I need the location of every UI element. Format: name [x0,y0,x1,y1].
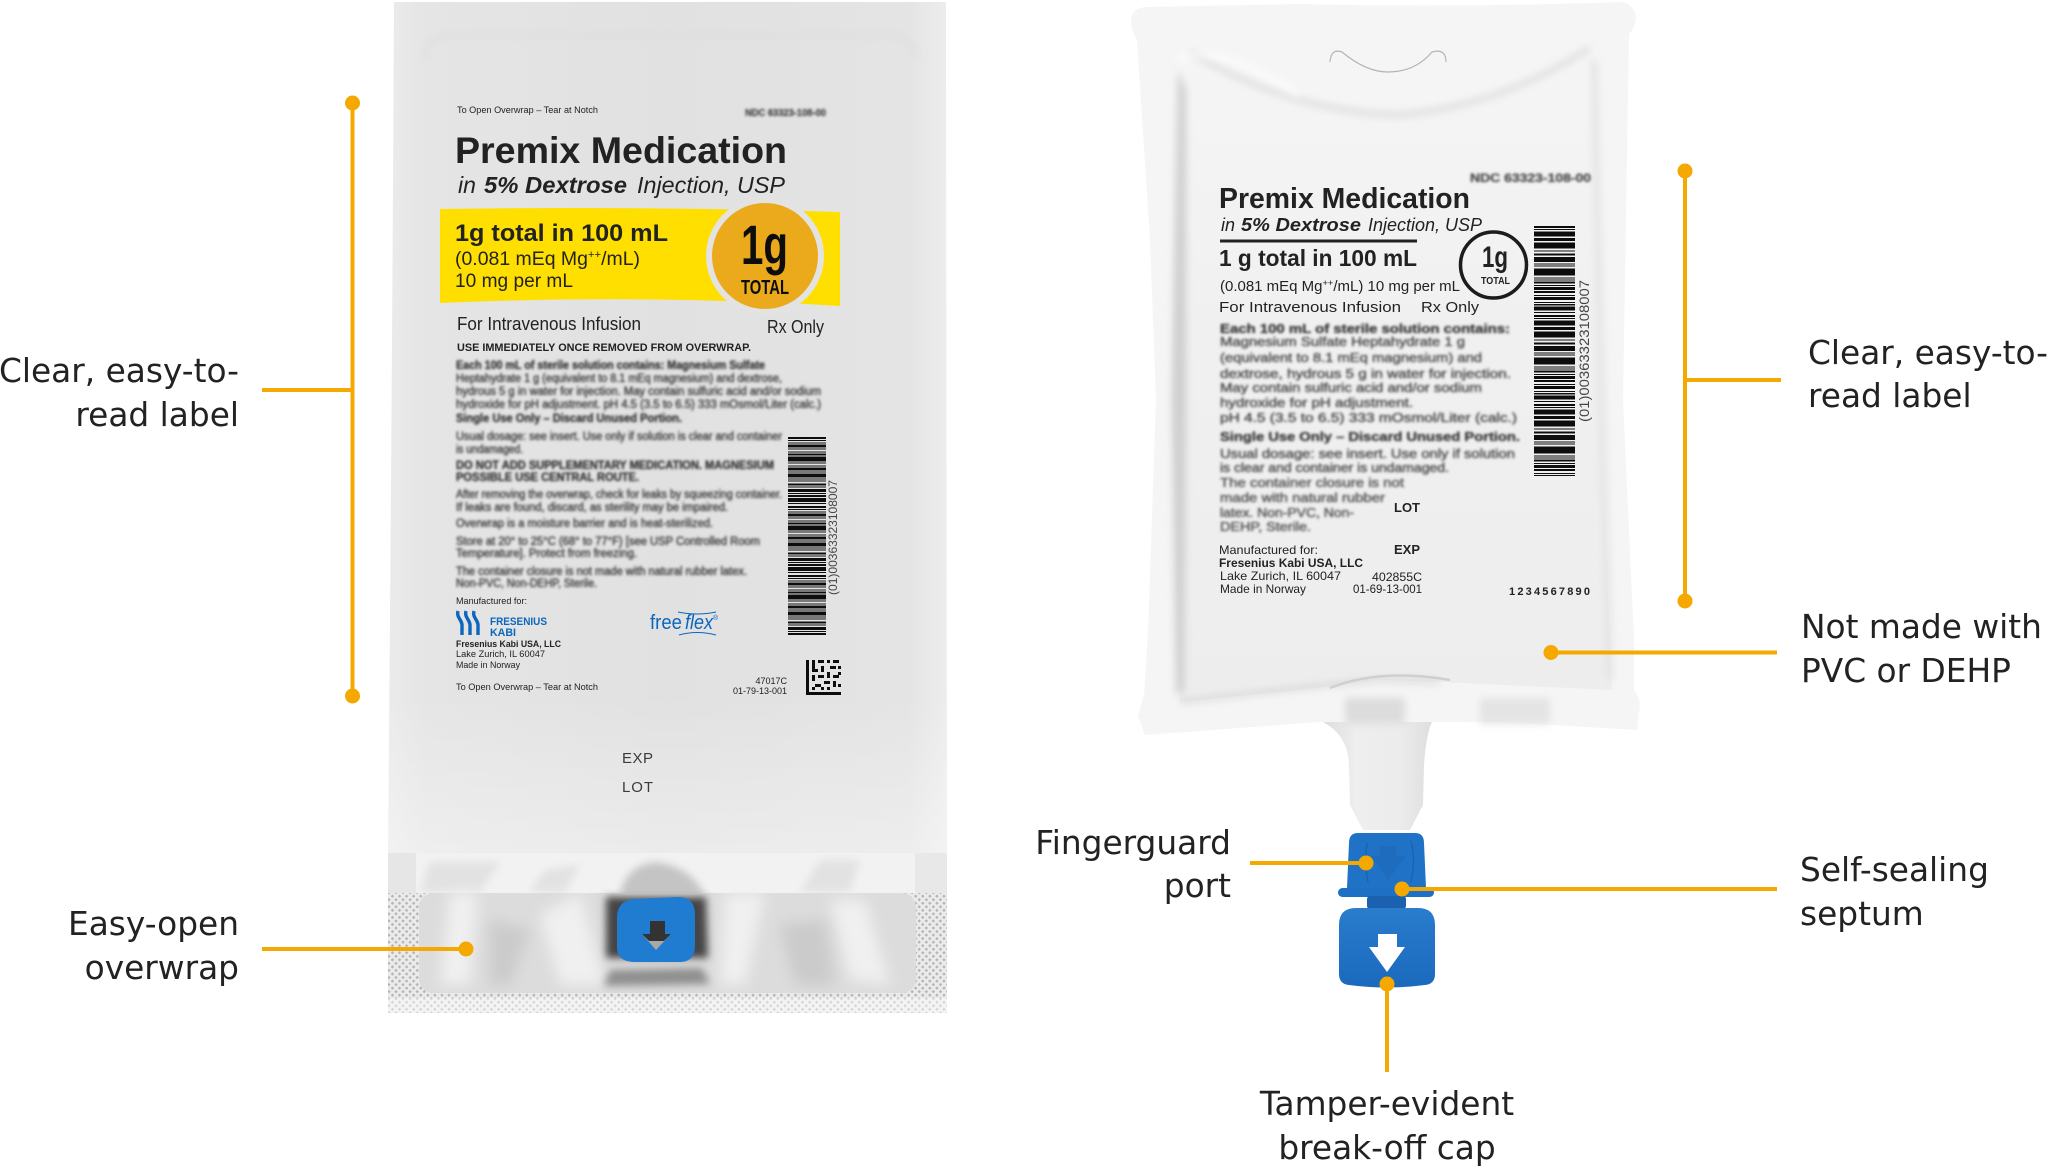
NDC and blurred fine print on overwrap: is undamaged. [456,444,523,456]
manufacturer: Manufactured for: [456,596,527,607]
diluent line: Injection, USP [1368,215,1482,235]
IV bag blurred fine print [1220,171,1591,534]
route and warning: USE IMMEDIATELY ONCE REMOVED FROM OVERWRAP. [457,342,751,354]
EXP and LOT: EXP [622,750,653,767]
manufacturer: Lake Zurich, IL 60047 [1220,569,1341,583]
route and warning [457,314,824,354]
manufacturer: Manufactured for: [1219,543,1318,557]
NDC and blurred fine print on overwrap: Temperature]. Protect from freezing. [456,548,637,560]
Fresenius Kabi logo: KABI [490,627,516,639]
manufacturer: Made in Norway [1220,582,1306,596]
IV bag label [1219,183,1592,598]
overwrap header note: To Open Overwrap – Tear at Notch [457,105,598,115]
port shadow in foil [604,897,710,986]
Fresenius Kabi logo: FRESENIUS [490,616,547,628]
callout: right label bracket [1678,164,1781,608]
NDC and blurred fine print on overwrap: Each 100 mL of sterile solution contains: Magnesium Sulfate [456,360,765,372]
dose badge: 1g [1482,241,1508,274]
fingerguard port [1347,833,1426,888]
callout: tamper-evident cap [1380,976,1394,1072]
label: clear easy-to-read right: read label [1808,377,1972,415]
label: clear easy-to-read left: read label [75,396,239,434]
strength: 1 g total in 100 mL [1219,245,1417,271]
diluent line [458,172,786,198]
NDC and blurred fine print on overwrap: Overwrap is a moisture barrier and is heat-sterilized. [456,518,713,530]
overwrapped bag [388,2,947,1013]
tamper-evident cap [1339,908,1435,988]
diluent line: in [458,172,476,198]
NDC and blurred fine print on overwrap [456,108,826,590]
manufacturer: Lake Zurich, IL 60047 [456,649,545,660]
NDC and blurred fine print on overwrap: Heptahydrate 1 g (equivalent to 8.1 mEq magnesium) and dextrose, [456,373,782,385]
IV bag blurred fine print: hydroxide for pH adjustment. [1220,395,1413,410]
manufacturer: Made in Norway [456,660,520,671]
strength text: 10 mg per mL [455,271,573,292]
label: easy-open overwrap [68,905,239,987]
IV bag blurred fine print: Magnesium Sulfate Heptahydrate 1 g [1220,334,1465,349]
diluent line [1221,215,1482,235]
overwrap body [388,2,947,853]
yellow dosage band [440,208,840,306]
rule [1220,240,1417,242]
diluent line: in [1221,215,1235,235]
label: tamper-evident break-off cap: Tamper-evident [1259,1085,1514,1123]
NDC and blurred fine print on overwrap: NDC 63323-108-00 [745,108,826,119]
hanger notch [1330,51,1446,72]
flange [1338,888,1434,897]
manufacturer [1219,543,1363,596]
lot code: 01-79-13-001 [733,686,787,696]
LOT and EXP: EXP [1394,542,1420,557]
manufacturer [456,596,561,671]
label: clear easy-to-read right [1808,334,2048,415]
barcode: (01)00363323108007 [826,480,840,595]
IV bag blurred fine print: Usual dosage: see insert. Use only if solution [1220,446,1515,461]
concentration: (0.081 mEq Mg [1220,279,1319,295]
label: clear easy-to-read left [0,352,239,434]
footer note: To Open Overwrap – Tear at Notch [456,682,598,692]
blue cap seen through foil [617,897,695,962]
bag body [1131,2,1640,735]
callout: not made with PVC [1544,645,1777,660]
route and warning: Rx Only [767,317,824,337]
data matrix [806,660,841,695]
route and warning: For Intravenous Infusion [457,314,641,334]
freeflex logo: free [650,612,682,634]
LOT and EXP: LOT [1394,500,1420,515]
strength text: 1g total in 100 mL [455,220,668,247]
label: self-sealing septum [1800,851,1989,933]
NDC and blurred fine print on overwrap: After removing the overwrap, check for leaks by squeezing container. [456,489,782,501]
codes [1353,570,1590,598]
IV bag blurred fine print: dextrose, hydrous 5 g in water for injection. [1220,366,1511,381]
label: self-sealing septum: septum [1800,895,1924,933]
IV bag blurred fine print: is clear and container is undamaged. [1220,460,1449,475]
IV bag blurred fine print: NDC 63323-108-00 [1470,171,1591,185]
label: self-sealing septum: Self-sealing [1800,851,1989,889]
callout: left label bracket [262,96,360,704]
port tube [1323,722,1432,830]
IV bag blurred fine print: pH 4.5 (3.5 to 6.5) 333 mOsmol/Liter (calc.) [1220,410,1517,425]
codes: 01-69-13-001 [1353,582,1422,596]
label: tamper-evident break-off cap [1259,1085,1514,1166]
dose badge: TOTAL [1481,276,1510,287]
NDC and blurred fine print on overwrap: Single Use Only – Discard Unused Portion. [456,413,682,425]
label: not made with PVC or DEHP [1801,608,2042,690]
IV bag blurred fine print: (equivalent to 8.1 mEq magnesium) and [1220,350,1482,365]
manufacturer: Fresenius Kabi USA, LLC [456,639,561,650]
NDC and blurred fine print on overwrap: Store at 20° to 25°C (68° to 77°F) [see USP Controlled Room [456,536,760,548]
NDC and blurred fine print on overwrap: hydroxide for pH adjustment. pH 4.5 (3.5 to 6.5) 333 mOsmol/Liter (calc.) [456,399,821,411]
dose badge [1460,232,1526,298]
overwrap tear band [388,853,947,895]
NDC and blurred fine print on overwrap: The container closure is not made with natural rubber latex. [456,566,747,578]
LOT and EXP [1394,500,1420,557]
lot code: 47017C [755,676,787,686]
NDC and blurred fine print on overwrap: If leaks are found, discard, as sterility may be impaired. [456,502,728,514]
diluent line: 5% Dextrose [1241,215,1361,235]
concentration: ++ [1322,278,1333,288]
diluent line: 5% Dextrose [484,172,627,198]
callout lines [262,96,1781,1072]
NDC and blurred fine print on overwrap: Non-PVC, Non-DEHP, Sterile. [456,578,597,590]
label: fingerguard port [1035,824,1231,905]
IV bag blurred fine print: Single Use Only – Discard Unused Portion. [1220,429,1520,444]
EXP and LOT [622,750,653,796]
NDC and blurred fine print on overwrap: hydrous 5 g in water for injection. May contain sulfuric acid and/or sodium [456,386,821,398]
neck [1367,896,1406,909]
diluent line: Injection, USP [637,172,786,198]
label: fingerguard port: port [1164,867,1231,905]
IV bag blurred fine print: latex. Non-PVC, Non- [1220,505,1354,520]
codes: 1234567890 [1509,586,1590,598]
IV bag blurred fine print: DEHP, Sterile. [1220,519,1311,534]
concentration: /mL) 10 mg per mL [1333,279,1460,295]
IV bag blurred fine print: The container closure is not [1220,475,1404,490]
drug name: Premix Medication [455,130,787,171]
strength text: /mL) [601,249,640,270]
label: tamper-evident break-off cap: break-off cap [1278,1129,1496,1166]
callout: fingerguard port [1250,856,1374,870]
dose badge: 1g [741,213,788,276]
label: easy-open overwrap: Easy-open [68,905,239,943]
callout: self-sealing septum [1394,882,1777,896]
blue fingerguard port and break-off cap [1338,833,1435,988]
strength text: (0.081 mEq Mg [455,249,585,270]
freeflex logo: flex [685,612,714,634]
barcode: (01)00363323108007 [1576,280,1592,422]
NDC and blurred fine print on overwrap: POSSIBLE USE CENTRAL ROUTE. [456,472,639,484]
manufacturer: Fresenius Kabi USA, LLC [1219,556,1363,570]
label: not made with PVC or DEHP: Not made with [1801,608,2042,646]
label: clear easy-to-read right: Clear, easy-to- [1808,334,2048,372]
label: fingerguard port: Fingerguard [1035,824,1231,862]
chamber shading [1172,48,1610,724]
route [1219,299,1480,316]
white arrow [1369,934,1405,972]
IV bag [1131,2,1640,830]
strength text [455,220,668,292]
strength text: ++ [588,249,601,261]
label: clear easy-to-read left: Clear, easy-to- [0,352,239,390]
label: easy-open overwrap: overwrap [85,949,239,987]
EXP and LOT: LOT [622,779,653,796]
foil seal section [388,893,947,1013]
overwrap label [440,105,841,796]
callout: easy-open overwrap [262,942,474,956]
freeflex logo: ® [713,614,719,622]
drug name: Premix Medication [1219,183,1470,215]
IV bag blurred fine print: made with natural rubber [1220,490,1386,505]
NDC and blurred fine print on overwrap: Usual dosage: see insert. Use only if solution is clear and container [456,431,782,443]
NDC and blurred fine print on overwrap: DO NOT ADD SUPPLEMENTARY MEDICATION. MAGNESIUM [456,460,774,472]
route: Rx Only [1421,299,1480,316]
Fresenius Kabi logo [458,611,547,639]
label: not made with PVC or DEHP: PVC or DEHP [1801,652,2011,690]
route: For Intravenous Infusion [1219,299,1401,316]
dose badge: TOTAL [741,277,789,299]
IV bag blurred fine print: May contain sulfuric acid and/or sodium [1220,380,1482,395]
lot code [733,676,787,696]
codes: 402855C [1372,570,1422,584]
bag solution chamber [1172,50,1612,702]
dose badge [706,197,824,315]
IV bag blurred fine print: Each 100 mL of sterile solution contains: [1220,321,1510,336]
freeflex logo [650,612,719,635]
